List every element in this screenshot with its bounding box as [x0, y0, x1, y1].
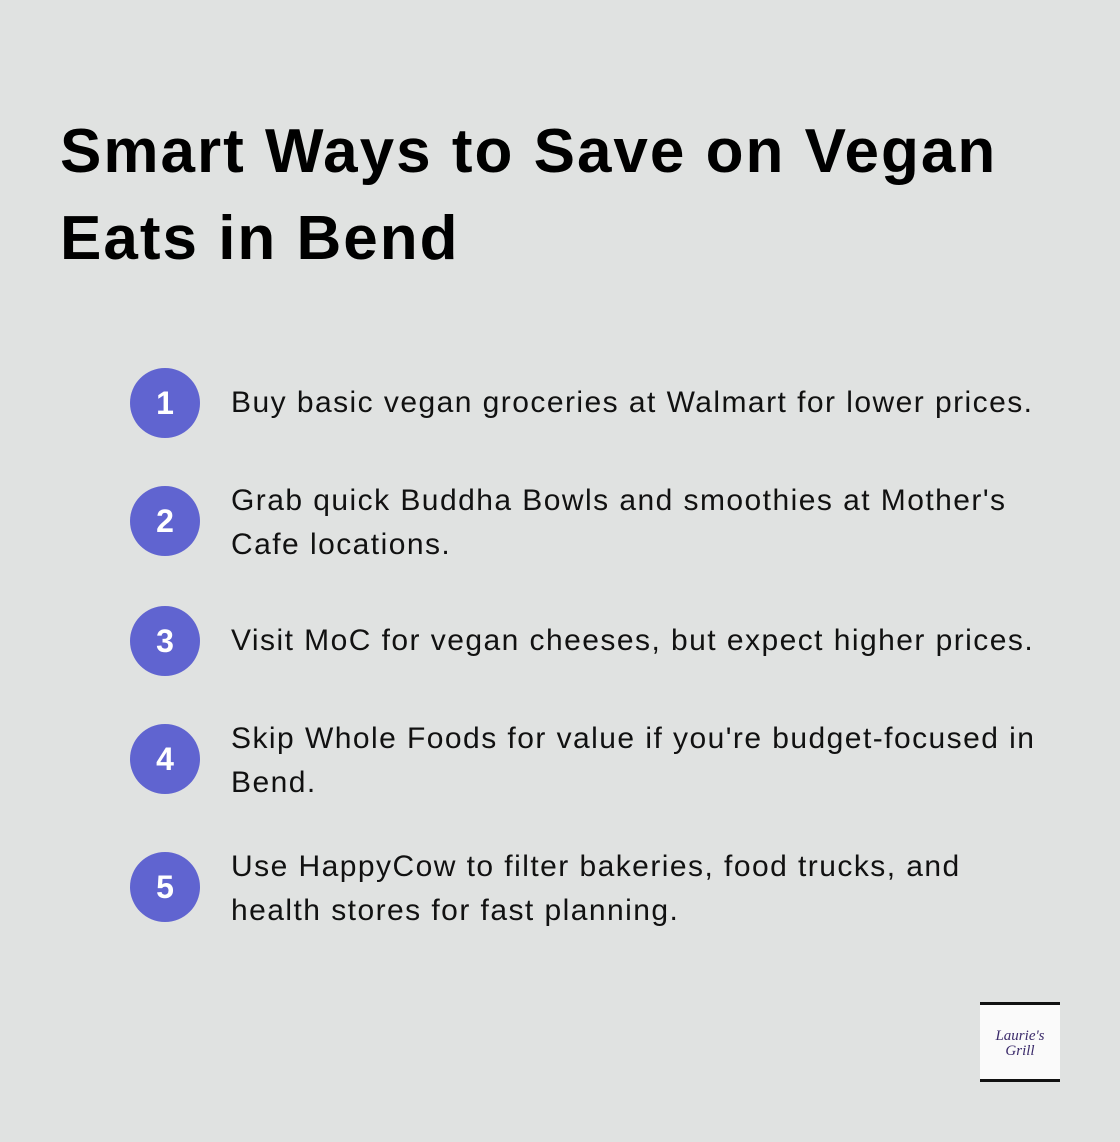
item 1: Buy basic vegan groceries at Walmart for lower prices. — [231, 386, 1033, 419]
logo — [980, 1002, 1060, 1082]
item 3 — [130, 606, 1034, 676]
item 2: Cafe locations. — [231, 528, 451, 561]
item 3: 3 — [156, 623, 174, 659]
item 2: Grab quick Buddha Bowls and smoothies at Mother's — [231, 484, 1006, 517]
item 4: Skip Whole Foods for value if you're budget-focused in — [231, 722, 1035, 755]
title: Smart Ways to Save on Vegan — [60, 117, 997, 186]
item 3: Visit MoC for vegan cheeses, but expect higher prices. — [231, 624, 1034, 657]
item 4 — [130, 722, 1035, 799]
item 1 — [130, 368, 1033, 438]
item 2: 2 — [156, 503, 174, 539]
logo: Grill — [1005, 1043, 1035, 1059]
title — [60, 117, 997, 273]
item 5: Use HappyCow to filter bakeries, food trucks, and — [231, 850, 961, 883]
item 5: 5 — [156, 869, 174, 905]
item 4: 4 — [156, 741, 174, 777]
item 5 — [130, 850, 961, 927]
item 5: health stores for fast planning. — [231, 894, 679, 927]
title: Eats in Bend — [60, 204, 460, 273]
item 4: Bend. — [231, 766, 317, 799]
item 1: 1 — [156, 385, 174, 421]
logo: Laurie's — [995, 1028, 1045, 1044]
item 2 — [130, 484, 1006, 561]
